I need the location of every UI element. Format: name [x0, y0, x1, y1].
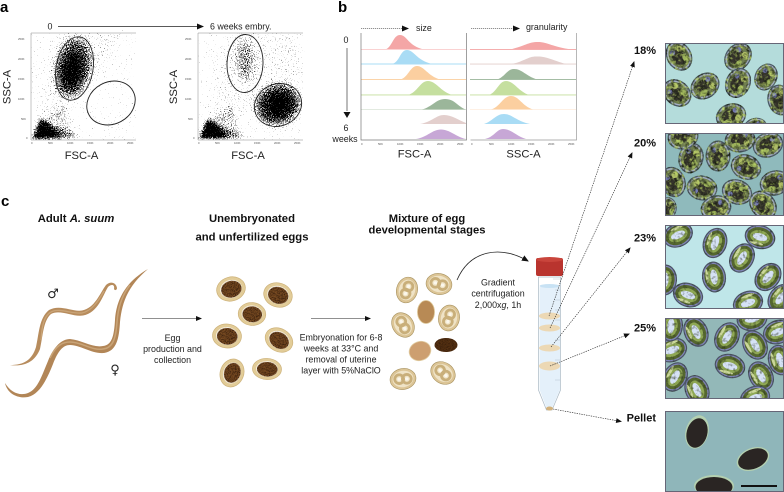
heading: adult worms: Adult A. suum [38, 213, 114, 225]
micrograph: 18% [665, 43, 784, 124]
text: gradient centrifugation: Gradient [481, 278, 516, 288]
fraction labels: 23% [634, 232, 656, 244]
histogram axes: 50K [378, 142, 383, 146]
micrograph: pellet with scale bar [665, 411, 784, 492]
scatter plot: 6 weeks [168, 32, 308, 162]
time axis arrow: 0 [344, 35, 349, 45]
scatter plot: 6 weeks: 150K [254, 141, 261, 145]
panel b: ridge histograms [331, 0, 576, 160]
scale bar [741, 485, 777, 487]
granularity arrow [471, 22, 568, 32]
scatter plot: 6 weeks: 250K [185, 37, 192, 41]
text: gradient centrifugation: 2,000xg, 1h [475, 300, 521, 310]
heading: mixture of stages [369, 213, 485, 236]
panel a: flow cytometry scatter plots [0, 0, 308, 162]
time axis arrow [331, 35, 358, 144]
text: gradient centrifugation [471, 278, 525, 310]
worm: female [5, 269, 148, 397]
histogram axes: 200K [437, 142, 444, 146]
scatter plot: week 0 [2, 30, 143, 162]
scatter plot: week 0: 0 [26, 136, 28, 140]
scatter plot: week 0: 100K [67, 141, 74, 145]
gate ellipses [51, 34, 143, 133]
histogram axes: 200K [548, 142, 555, 146]
histogram axes: 150K [417, 142, 424, 146]
scatter plot: 6 weeks: 150K [185, 77, 192, 81]
histogram axes: 0 [471, 142, 473, 146]
scatter plot: 6 weeks: 0 [193, 136, 195, 140]
scatter plot: 6 weeks: 0 [198, 141, 200, 145]
arrow: egg production [142, 318, 201, 320]
text: embryonation: Embryonation for 6-8 [300, 332, 383, 342]
centrifuge tube [536, 257, 563, 410]
heading: mixture of stages: Mixture of egg [389, 213, 465, 225]
scatter plot: week 0: 50K [48, 141, 53, 145]
text: egg production: production and [143, 344, 202, 354]
micrograph: 23% [665, 225, 784, 309]
heading: unembryonated eggs: Unembryonated [209, 213, 295, 225]
fraction labels: Pellet [627, 412, 656, 424]
scatter plot: week 0: 200K [18, 57, 25, 61]
histogram axes: 150K [528, 142, 535, 146]
text: embryonation [300, 332, 383, 376]
text: egg production [143, 333, 202, 365]
fraction labels: 25% [634, 322, 656, 334]
scatter plot: 6 weeks: SSC-A [168, 69, 180, 104]
gate ellipses [226, 34, 308, 133]
text: embryonation: weeks at 33°C and [303, 344, 378, 354]
timeline arrow 0 to 6 weeks: 6 weeks embry. [210, 22, 272, 32]
size arrow: size [416, 23, 432, 33]
time axis arrow: 6 [344, 123, 349, 133]
heading: unembryonated eggs: and unfertilized eggs [196, 232, 308, 244]
timeline arrow 0 to 6 weeks [48, 22, 272, 32]
scatter plot: 6 weeks: FSC-A [231, 150, 265, 162]
histogram axes: 250K [568, 142, 575, 146]
scatter plot: 6 weeks: 50K [215, 141, 220, 145]
micrograph: 20% [665, 133, 784, 216]
fraction labels: 18% [634, 45, 656, 57]
histogram axes: 100K [508, 142, 515, 146]
worm: female: ♀ [110, 363, 120, 378]
scatter plot: week 0: 200K [107, 141, 114, 145]
histogram axes: SSC-A [506, 148, 541, 160]
worm: male: ♂ [47, 287, 59, 302]
histogram axes: FSC-A [398, 148, 432, 160]
histogram axes: 100K [397, 142, 404, 146]
text: embryonation: layer with 5%NaClO [301, 366, 381, 376]
scatter plot: 6 weeks: 250K [294, 141, 301, 145]
worm: male [10, 283, 117, 365]
scatter plot: week 0: 100K [18, 97, 25, 101]
scatter plot: 6 weeks: 100K [185, 97, 192, 101]
scatter plot: 6 weeks: 100K [234, 141, 241, 145]
heading: unembryonated eggs [196, 213, 308, 244]
panel letter c: c [1, 193, 9, 210]
dashed arrows to fractions [549, 62, 634, 422]
histogram axes: 250K [457, 142, 464, 146]
scatter plot: week 0: SSC-A [2, 69, 14, 104]
scatter plot: 6 weeks: 200K [185, 57, 192, 61]
scatter plot: week 0: 150K [18, 77, 25, 81]
scatter plot: week 0: 250K [127, 141, 134, 145]
scatter plot: week 0: 0 [31, 141, 33, 145]
curved arrow to tube [457, 252, 528, 280]
size arrow [361, 23, 432, 33]
scatter plot: week 0: 50K [21, 117, 26, 121]
time axis arrow: weeks [331, 134, 358, 144]
text: egg production: Egg [165, 333, 180, 343]
micrograph: 25% [665, 318, 784, 399]
scatter plot: week 0: 250K [18, 37, 25, 41]
heading: mixture of stages: developmental stages [369, 224, 485, 236]
text: gradient centrifugation: centrifugation [471, 288, 525, 298]
unembryonated eggs [212, 274, 297, 390]
arrow: embryonation [311, 318, 370, 320]
histogram: FSC-A [361, 35, 466, 139]
histogram axes [361, 33, 576, 160]
scatter plot: week 0: 150K [87, 141, 94, 145]
text: egg production: collection [154, 355, 191, 365]
histogram axes: 50K [489, 142, 494, 146]
scatter plot: 6 weeks: 200K [274, 141, 281, 145]
scatter plot: week 0: FSC-A [65, 150, 99, 162]
fraction labels [627, 45, 656, 424]
text: embryonation: removal of uterine [305, 354, 377, 364]
fraction labels: 20% [634, 138, 656, 150]
granularity arrow: granularity [526, 22, 568, 32]
histogram axes: 0 [361, 142, 363, 146]
histogram: SSC-A [470, 42, 576, 139]
timeline arrow 0 to 6 weeks: 0 [48, 22, 53, 32]
mixed-stage eggs [387, 271, 462, 392]
scatter plot: 6 weeks: 50K [188, 117, 193, 121]
